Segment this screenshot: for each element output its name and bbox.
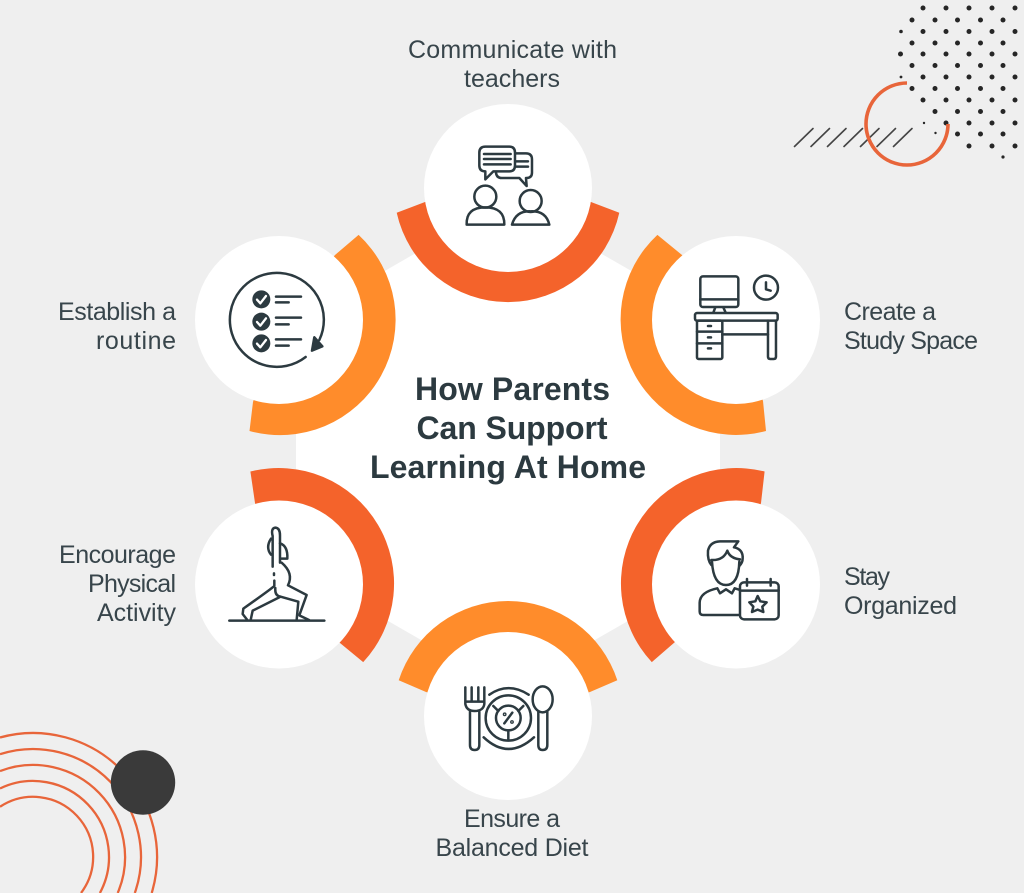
icon: routine checklist [230, 273, 324, 367]
white circle: study space [652, 236, 820, 404]
icon: study desk [695, 276, 778, 359]
decoration: hatch lines [794, 128, 912, 146]
label: establish a routine [58, 298, 176, 355]
label: communicate with teachers [408, 36, 617, 93]
arc: diet [399, 601, 617, 716]
label: create a study space [844, 298, 978, 355]
arc: routine [250, 235, 396, 435]
label: stay organized: Stay [844, 563, 890, 591]
white circle: organized [652, 500, 820, 668]
icon: person with calendar [700, 541, 779, 619]
white circle: routine [195, 236, 363, 404]
arc: study space [621, 235, 766, 435]
label: ensure a balanced diet [436, 805, 589, 862]
decoration: dot grid [898, 6, 1018, 159]
title: How Parents [415, 371, 610, 407]
icon: conversation between two people [467, 147, 549, 225]
decoration: open orange ring [866, 83, 948, 165]
arc: organized [621, 468, 765, 662]
white circle: physical activity [195, 500, 363, 668]
label: encourage physical activity: Activity [97, 599, 176, 627]
icon: plate, fork and spoon [465, 686, 553, 750]
check strokes [257, 296, 266, 347]
check marks [252, 290, 270, 352]
decoration: dark circle [111, 750, 175, 815]
label: ensure a balanced diet: Balanced Diet [436, 834, 589, 862]
white circle: communicate [424, 104, 592, 272]
decoration: concentric arcs [0, 733, 157, 893]
label: encourage physical activity: Physical [88, 570, 176, 598]
white circle: diet [424, 632, 592, 800]
title: Learning At Home [370, 449, 646, 485]
label: establish a routine: routine [96, 327, 176, 355]
label: communicate with teachers: teachers [464, 65, 560, 93]
label: create a study space: Create a [844, 298, 936, 326]
icon: yoga pose [229, 528, 324, 621]
label: communicate with teachers: Communicate with [408, 36, 617, 64]
label: encourage physical activity: Encourage [59, 541, 176, 569]
label: stay organized [844, 563, 957, 620]
arc: physical activity [250, 468, 394, 662]
central white hexagon [296, 200, 720, 690]
title [370, 371, 646, 485]
label: ensure a balanced diet: Ensure a [464, 805, 560, 833]
loop arrow [230, 273, 324, 367]
title: Can Support [416, 410, 608, 446]
label: stay organized: Organized [844, 592, 957, 620]
label: create a study space: Study Space [844, 327, 978, 355]
arc: communicate [397, 188, 619, 302]
label: encourage physical activity [59, 541, 176, 627]
label: establish a routine: Establish a [58, 298, 176, 326]
